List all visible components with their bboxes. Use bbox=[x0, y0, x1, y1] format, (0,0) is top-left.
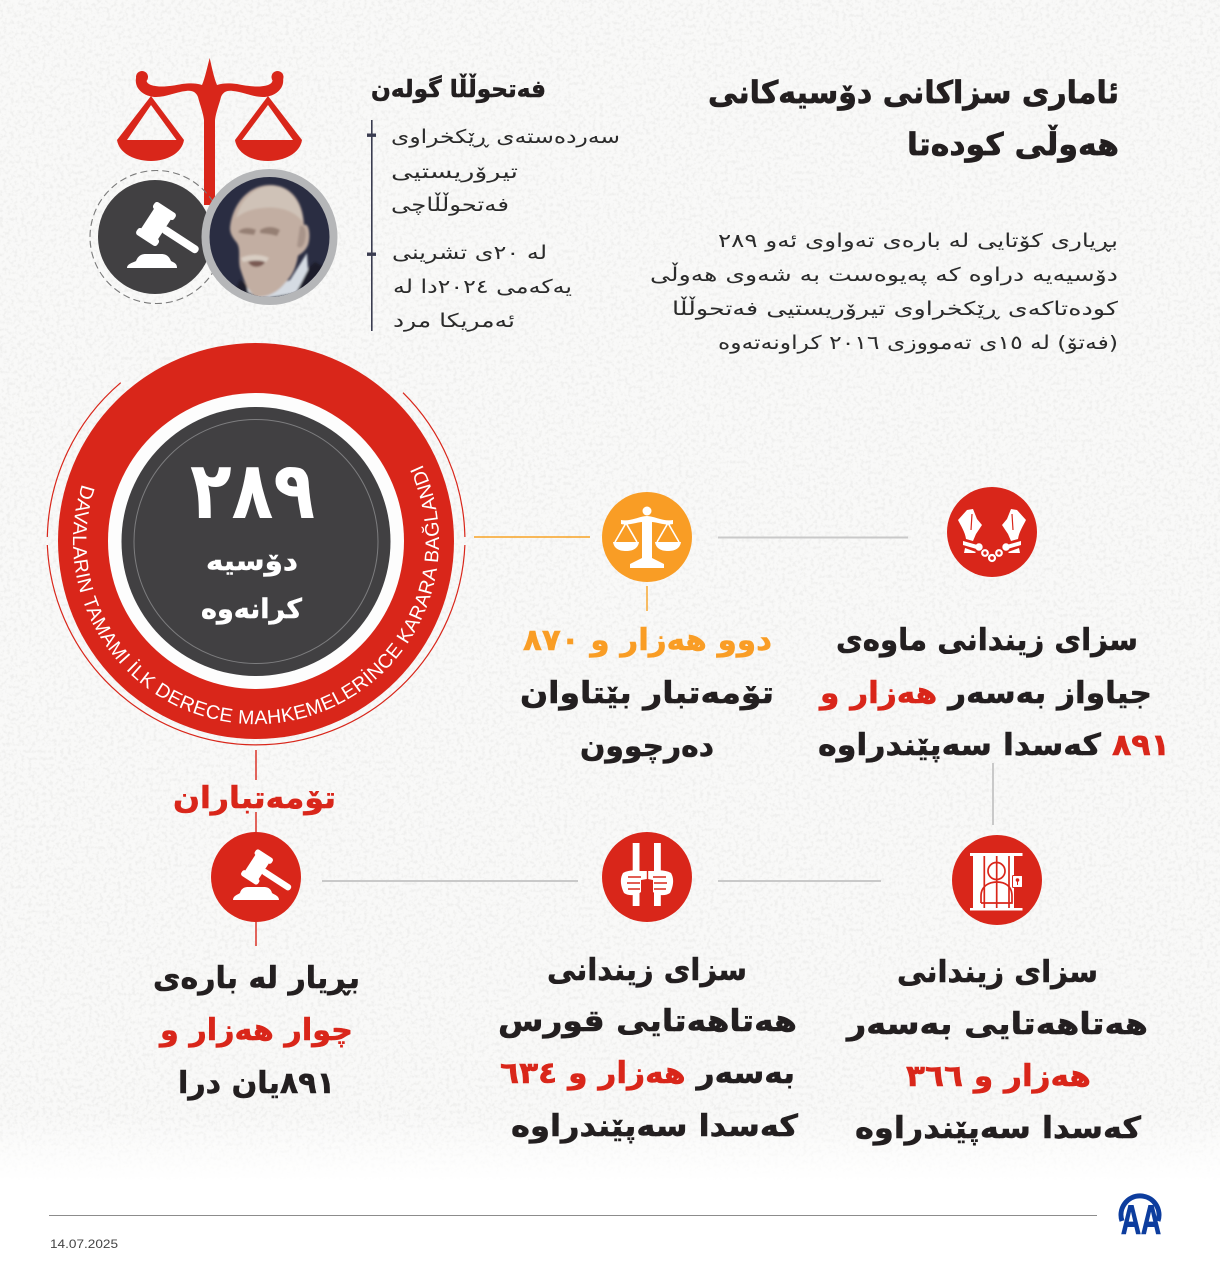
biography text: ئەمریکا مرد bbox=[393, 310, 515, 332]
heading: defendants: تۆمەتباران bbox=[173, 781, 336, 816]
stat: verdicts bbox=[153, 961, 360, 1101]
intro text block bbox=[650, 230, 1119, 354]
icon: hands on prison bars bbox=[602, 832, 692, 922]
ring label: کرانەوە bbox=[201, 594, 302, 625]
biography text: فەتحوڵڵاچی bbox=[391, 192, 509, 216]
big number: ٢٨٩ bbox=[190, 444, 315, 537]
stat: aggravated life sentence: سزای زیندانی bbox=[547, 953, 747, 988]
stat: life sentence: سزای زیندانی bbox=[897, 955, 1098, 990]
intro text block: کودەتاکەی ڕێکخراوی تیرۆریستیی فەتحوڵڵا bbox=[672, 296, 1119, 320]
biography text bbox=[391, 126, 620, 332]
logo: AA: AA bbox=[1121, 1196, 1161, 1242]
biography panel bbox=[367, 73, 620, 332]
outer thin arcs bbox=[47, 383, 465, 745]
stat: life sentence: هەزار و ٣٦٦ bbox=[906, 1059, 1091, 1094]
biography heading: فەتحوڵڵا گولەن bbox=[371, 73, 546, 103]
stat: varied prison terms: ٨٩١ کەسدا سەپێندراوە bbox=[818, 728, 1170, 763]
biography text: سەردەستەی ڕێکخراوی bbox=[391, 126, 620, 148]
title: هەوڵی کودەتا bbox=[907, 125, 1119, 163]
intro text block: دۆسیەیە دراوە کە پەیوەست بە شەوی هەوڵی bbox=[650, 262, 1118, 286]
stat: acquitted bbox=[520, 623, 774, 764]
stat: verdicts: چوار هەزار و bbox=[158, 1013, 353, 1048]
stat: life sentence: کەسدا سەپێندراوە bbox=[855, 1111, 1142, 1146]
icon: prisoner in cell bbox=[952, 835, 1042, 925]
icon: gavel badge bbox=[90, 170, 223, 304]
stat: aggravated life sentence bbox=[498, 953, 799, 1144]
stat: aggravated life sentence: هەتاهەتایی قورس bbox=[498, 1004, 797, 1039]
footer rule bbox=[49, 1215, 1097, 1216]
biography text: لە ٢٠ی تشرینی bbox=[392, 242, 547, 264]
stat: verdicts: ٨٩١یان درا bbox=[178, 1066, 335, 1101]
biography text: یەکەمی ٢٠٢٤دا لە bbox=[393, 276, 572, 298]
ring caption: DAVALARIN TAMAMI İLK DERECE MAHKEMELERİNCE KARARA BAĞLANDI bbox=[72, 466, 440, 724]
icon: gavel bbox=[211, 832, 301, 922]
ring label bbox=[201, 546, 302, 625]
total cases ring bbox=[46, 343, 466, 746]
stat: varied prison terms: سزای زیندانی ماوەی bbox=[836, 623, 1138, 658]
icon: handcuffs bbox=[947, 487, 1037, 577]
stat: verdicts: بڕیار لە بارەی bbox=[153, 961, 360, 996]
stat: life sentence: هەتاهەتایی بەسەر bbox=[845, 1007, 1148, 1042]
title: ئاماری سزاکانی دۆسیەکانی bbox=[708, 75, 1119, 111]
logo: AA bbox=[1121, 1196, 1161, 1242]
stat: acquitted: دەرچوون bbox=[580, 729, 714, 764]
stat: varied prison terms: جیاواز بەسەر هەزار و bbox=[818, 676, 1152, 711]
stat: acquitted: تۆمەتبار بێتاوان bbox=[520, 676, 774, 711]
stat: varied prison terms bbox=[818, 623, 1170, 763]
connector lines bbox=[256, 537, 993, 946]
icon: balance scale bbox=[602, 492, 692, 582]
biography text: تیرۆریستیی bbox=[391, 161, 518, 183]
stat: acquitted: دوو هەزار و ٨٧٠ bbox=[523, 623, 772, 658]
icon: scales of justice bbox=[117, 58, 302, 205]
date: 14.07.2025 bbox=[50, 1237, 118, 1251]
title bbox=[708, 75, 1119, 163]
stat: aggravated life sentence: کەسدا سەپێندراوە bbox=[511, 1109, 799, 1144]
intro text block: (فەتۆ) لە ١٥ی تەمووزی ٢٠١٦ کراونەتەوە bbox=[718, 332, 1118, 354]
stat: aggravated life sentence: بەسەر هەزار و ٦٣٤ bbox=[500, 1056, 795, 1091]
stat: life sentence bbox=[845, 955, 1148, 1146]
portrait photo bbox=[202, 169, 338, 305]
intro text block: بڕیاری کۆتایی لە بارەی تەواوی ئەو ٢٨٩ bbox=[718, 230, 1118, 252]
timeline rule bbox=[367, 120, 376, 331]
ring label: دۆسیە bbox=[206, 546, 298, 577]
